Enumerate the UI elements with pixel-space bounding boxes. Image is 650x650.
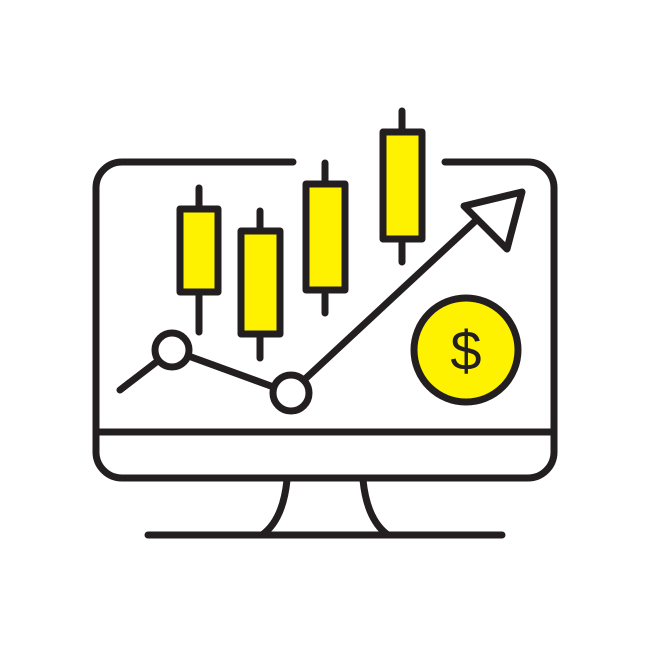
icon: dollar coin xyxy=(414,298,518,402)
icon: dollar coin: $ xyxy=(450,319,482,382)
candle 4 xyxy=(383,111,422,262)
candle 3 xyxy=(306,163,345,313)
candle 2 xyxy=(241,211,280,358)
monitor frame xyxy=(96,162,554,478)
monitor stand xyxy=(148,480,502,535)
candle 1 xyxy=(180,188,218,332)
candlestick chart xyxy=(180,111,422,358)
trend line arrow xyxy=(120,192,522,411)
